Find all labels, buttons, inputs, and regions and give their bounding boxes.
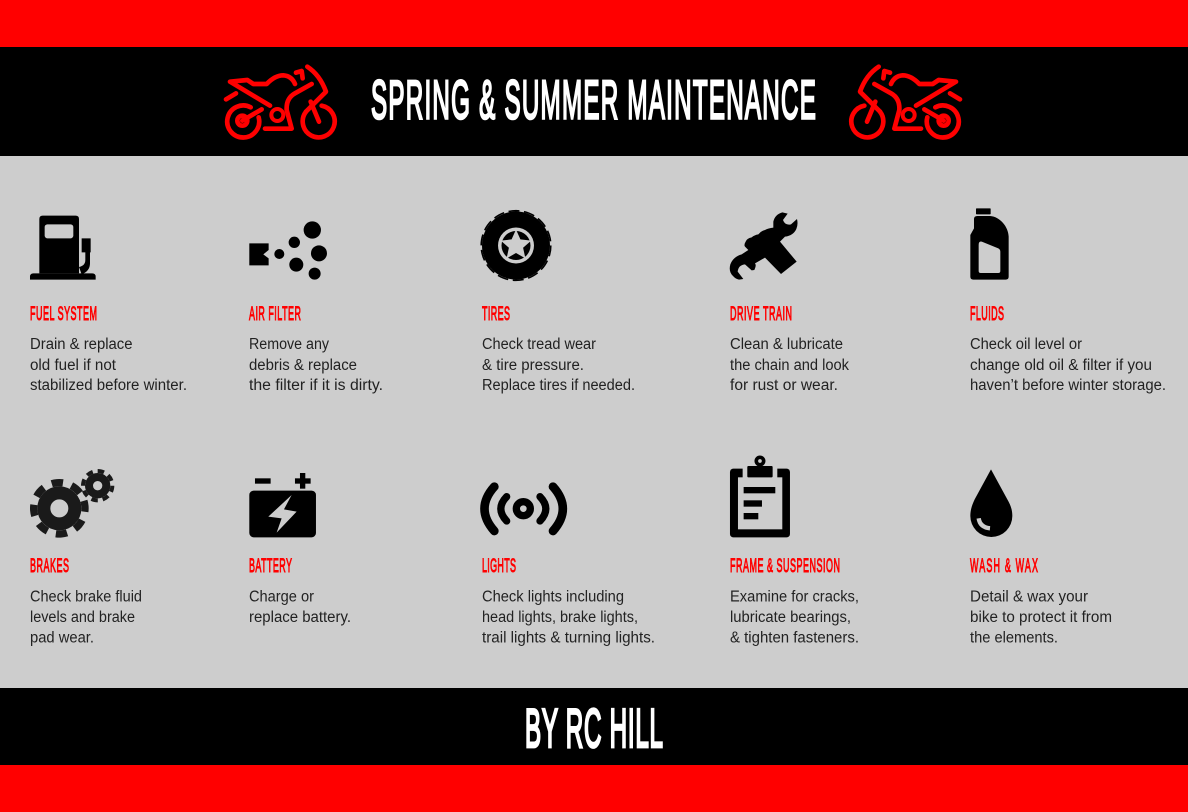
text block: lubricate bearings, — [730, 609, 851, 626]
panel: fuel system — [30, 216, 187, 394]
panel: frame and suspension — [730, 457, 859, 646]
text block: head lights, brake lights, — [482, 609, 638, 626]
heading: DRIVE TRAIN — [730, 303, 792, 325]
text block: Check brake fluid — [30, 588, 142, 606]
text block: change old oil & filter if you — [970, 357, 1152, 374]
icon: air filter — [249, 221, 327, 280]
text block: Clean & lubricate — [730, 336, 843, 353]
text block: haven’t before winter storage. — [970, 377, 1166, 394]
text block: Examine for cracks, — [730, 588, 859, 606]
text block: Replace tires if needed. — [482, 377, 635, 394]
text block — [249, 336, 383, 394]
text block — [482, 588, 655, 646]
footer panel — [0, 688, 1188, 765]
heading: AIR FILTER — [249, 303, 301, 325]
icon: battery — [249, 473, 316, 537]
text block: Check oil level or — [970, 336, 1082, 353]
icon: water drop — [970, 469, 1012, 537]
panel: wash and wax — [970, 469, 1112, 646]
icon: wrench in hand — [730, 212, 798, 280]
text block: Remove any — [249, 336, 329, 353]
icon: motorcycle right — [851, 67, 960, 137]
text block — [30, 336, 187, 394]
icon: motorcycle left — [226, 67, 335, 137]
text block — [730, 336, 849, 394]
bottom red band — [0, 765, 1188, 812]
text block — [970, 336, 1166, 394]
panel: drive train — [730, 212, 849, 394]
text block: & tighten fasteners. — [730, 630, 859, 646]
icon: gears — [32, 468, 115, 536]
text block: Drain & replace — [30, 336, 132, 353]
panel: lights — [482, 487, 655, 646]
heading: TIRES — [482, 303, 510, 325]
panel: fluids — [970, 208, 1166, 394]
text block — [970, 588, 1112, 646]
text block: trail lights & turning lights. — [482, 630, 655, 646]
heading: WASH & WAX — [970, 555, 1038, 577]
title: SPRING & SUMMER MAINTENANCE — [371, 71, 816, 131]
panel: battery — [249, 473, 351, 626]
text block: the elements. — [970, 630, 1058, 646]
text block: bike to protect it from — [970, 609, 1112, 626]
text block: Check tread wear — [482, 336, 596, 353]
text block: & tire pressure. — [482, 357, 584, 374]
heading: BRAKES — [30, 555, 69, 577]
panel: brakes — [30, 468, 142, 646]
heading: FRAME & SUSPENSION — [730, 555, 840, 577]
icon: fuel pump — [30, 216, 96, 280]
header panel — [0, 47, 1188, 156]
heading: FUEL SYSTEM — [30, 303, 97, 325]
icon: clipboard — [730, 457, 790, 537]
text block: the filter if it is dirty. — [249, 377, 383, 394]
text block: Charge or — [249, 588, 314, 606]
top red band — [0, 0, 1188, 47]
footer credit: BY RC HILL — [525, 699, 663, 760]
text block: the chain and look — [730, 357, 849, 374]
panel: air filter — [249, 221, 383, 394]
text block — [30, 588, 142, 646]
heading: LIGHTS — [482, 555, 516, 577]
heading: BATTERY — [249, 555, 292, 577]
panel: tires — [481, 211, 635, 394]
text block: Check lights including — [482, 588, 624, 606]
text block: stabilized before winter. — [30, 377, 187, 394]
text block: for rust or wear. — [730, 377, 838, 394]
text block: replace battery. — [249, 609, 351, 626]
heading: FLUIDS — [970, 303, 1004, 325]
text block — [249, 588, 351, 626]
text block: levels and brake — [30, 609, 135, 626]
text block: debris & replace — [249, 357, 357, 374]
text block — [482, 336, 635, 394]
text block — [730, 588, 859, 646]
icon: oil bottle — [970, 208, 1009, 280]
icon: tire — [481, 211, 551, 280]
icon: light signal — [484, 487, 563, 531]
text block: old fuel if not — [30, 357, 117, 374]
text block: pad wear. — [30, 630, 94, 646]
text block: Detail & wax your — [970, 588, 1088, 606]
